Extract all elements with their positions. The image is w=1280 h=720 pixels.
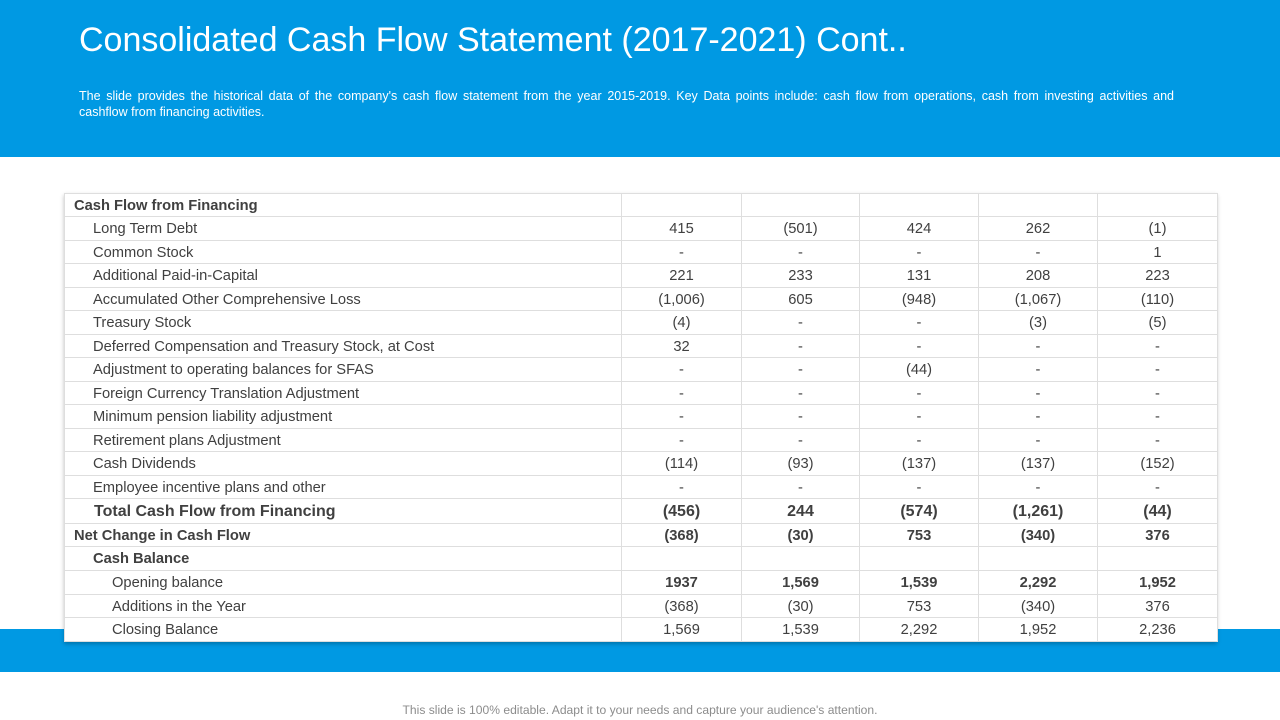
row: closing balance: 2,236 (1139, 622, 1176, 638)
row: accumulated other comprehensive loss: 605 (788, 292, 813, 308)
row: additional paid-in-capital: 221 (669, 268, 694, 284)
row: treasury stock: Treasury Stock (93, 315, 191, 331)
row: additional paid-in-capital: Additional Paid-in-Capital (93, 268, 258, 284)
row: long term debt: 415 (669, 221, 694, 237)
row: common stock: - (917, 244, 921, 260)
row: deferred compensation: - (1036, 338, 1040, 354)
row: additional paid-in-capital (93, 268, 1170, 284)
row: minimum pension liability: Minimum pension liability adjustment (93, 409, 332, 425)
row: net change in cash flow (74, 528, 1170, 544)
row: treasury stock (93, 315, 1166, 331)
row: accumulated other comprehensive loss: Accumulated Other Comprehensive Loss (93, 292, 361, 308)
description text: The slide provides the historical data of the company's cash flow statement from the year 2015-2019. Key Data points include: cash flow from operations, cash from investing activities and (79, 89, 1174, 103)
row: treasury stock: - (917, 315, 921, 331)
row: total cash flow from financing: (574) (900, 502, 938, 520)
row: closing balance: Closing Balance (112, 622, 218, 638)
row: adjustment to operating balances: - (798, 362, 803, 378)
row: cash balance heading: Cash Balance (93, 551, 189, 567)
lower blue band (0, 629, 1280, 672)
row: opening balance: 2,292 (1020, 575, 1056, 591)
row: total cash flow from financing: (44) (1143, 502, 1172, 520)
row: employee incentive plans: - (917, 480, 921, 496)
row: additional paid-in-capital: 131 (907, 268, 931, 284)
description text (79, 89, 1174, 119)
row: common stock: - (679, 244, 684, 260)
row: cash dividends: (137) (1021, 456, 1055, 472)
row: total cash flow from financing: (1,261) (1013, 502, 1063, 520)
row: retirement plans adjustment: - (1155, 432, 1160, 448)
row: minimum pension liability: - (917, 409, 921, 425)
row: total cash flow from financing: (456) (663, 502, 700, 520)
header band (0, 0, 1280, 157)
row: opening balance: 1937 (665, 575, 698, 591)
row: retirement plans adjustment: - (798, 432, 803, 448)
row: cash dividends (93, 456, 1175, 472)
row: long term debt: (501) (783, 221, 818, 237)
row: opening balance: 1,539 (901, 575, 937, 591)
row: retirement plans adjustment (93, 432, 1160, 448)
row: minimum pension liability: - (679, 409, 684, 425)
row: minimum pension liability: - (798, 409, 803, 425)
row: employee incentive plans: - (1155, 480, 1160, 496)
row: deferred compensation: - (917, 338, 921, 354)
row: foreign currency translation: - (798, 386, 803, 402)
row: cash dividends: Cash Dividends (93, 456, 196, 472)
row: deferred compensation (93, 338, 1160, 354)
row: foreign currency translation: Foreign Currency Translation Adjustment (93, 386, 359, 402)
row: foreign currency translation: - (917, 386, 921, 402)
row: deferred compensation: Deferred Compensation and Treasury Stock, at Cost (93, 338, 434, 354)
row: common stock: Common Stock (93, 244, 193, 260)
row: total cash flow from financing (94, 502, 1172, 520)
row: employee incentive plans: - (679, 480, 684, 496)
row: minimum pension liability: - (1155, 409, 1160, 425)
row: opening balance (112, 575, 1176, 591)
panel: cash flow table (64, 193, 1217, 642)
row: additions in the year (112, 598, 1170, 614)
row: retirement plans adjustment: - (1036, 432, 1040, 448)
row: employee incentive plans: Employee incentive plans and other (93, 480, 326, 496)
row: accumulated other comprehensive loss: (1,067) (1015, 292, 1061, 308)
row: closing balance: 1,952 (1020, 622, 1056, 638)
row: cash dividends: (137) (902, 456, 936, 472)
row: cash dividends: (152) (1140, 456, 1175, 472)
row: long term debt: 424 (907, 221, 931, 237)
row: deferred compensation: - (1155, 338, 1160, 354)
row: net change in cash flow: (340) (1021, 528, 1055, 544)
row: employee incentive plans: - (798, 480, 803, 496)
row: long term debt: Long Term Debt (93, 221, 197, 237)
description text: cashflow from financing activities. (79, 105, 264, 119)
row: foreign currency translation: - (679, 386, 684, 402)
row: long term debt: 262 (1026, 221, 1050, 237)
row: employee incentive plans (93, 480, 1160, 496)
row: foreign currency translation: - (1155, 386, 1160, 402)
row: adjustment to operating balances: - (679, 362, 684, 378)
row: opening balance: 1,569 (782, 575, 819, 591)
row: additional paid-in-capital: 208 (1026, 268, 1050, 284)
row: employee incentive plans: - (1036, 480, 1040, 496)
row: additions in the year: (30) (787, 598, 814, 614)
row: additions in the year: 753 (907, 598, 931, 614)
footer note: This slide is 100% editable. Adapt it to your needs and capture your audience's attention. (403, 703, 877, 717)
row: net change in cash flow: (30) (787, 528, 814, 544)
row: treasury stock: (4) (673, 315, 690, 331)
title: Consolidated Cash Flow Statement (2017-2021) Cont.. (79, 21, 907, 59)
row: retirement plans adjustment: - (679, 432, 684, 448)
row: cash dividends: (93) (787, 456, 814, 472)
row: deferred compensation: 32 (673, 338, 690, 354)
row: deferred compensation: - (798, 338, 803, 354)
row: additions in the year: (368) (664, 598, 699, 614)
row: common stock: - (798, 244, 803, 260)
row: opening balance: Opening balance (112, 575, 223, 591)
row: total cash flow from financing: 244 (787, 502, 814, 520)
row: treasury stock: (5) (1149, 315, 1166, 331)
row: net change in cash flow: 376 (1145, 528, 1170, 544)
row: treasury stock: (3) (1029, 315, 1047, 331)
row: additions in the year: Additions in the Year (112, 598, 246, 614)
row: net change in cash flow: 753 (907, 528, 931, 544)
row: closing balance (112, 622, 1176, 638)
row: retirement plans adjustment: Retirement plans Adjustment (93, 432, 281, 448)
row: opening balance: 1,952 (1139, 575, 1176, 591)
row: net change in cash flow: (368) (664, 528, 699, 544)
row: total cash flow from financing: Total Cash Flow from Financing (94, 502, 335, 520)
row: net change in cash flow: Net Change in Cash Flow (74, 528, 250, 544)
row: adjustment to operating balances: - (1155, 362, 1160, 378)
row: cash flow from financing heading: Cash Flow from Financing (74, 198, 258, 214)
row: minimum pension liability (93, 409, 1160, 425)
row: adjustment to operating balances: (44) (906, 362, 932, 378)
row: long term debt: (1) (1149, 221, 1166, 237)
row: cash dividends: (114) (665, 456, 698, 472)
row: closing balance: 2,292 (901, 622, 937, 638)
row: closing balance: 1,539 (782, 622, 819, 638)
row: treasury stock: - (798, 315, 803, 331)
row: adjustment to operating balances: - (1036, 362, 1040, 378)
row: foreign currency translation: - (1036, 386, 1040, 402)
row: additions in the year: 376 (1145, 598, 1170, 614)
row: closing balance: 1,569 (663, 622, 700, 638)
row: retirement plans adjustment: - (917, 432, 921, 448)
row: minimum pension liability: - (1036, 409, 1040, 425)
row: accumulated other comprehensive loss: (948) (902, 292, 936, 308)
row: common stock: - (1036, 244, 1040, 260)
row: additions in the year: (340) (1021, 598, 1055, 614)
row: adjustment to operating balances (93, 362, 1160, 378)
row: foreign currency translation (93, 386, 1160, 402)
row: accumulated other comprehensive loss: (110) (1141, 292, 1174, 308)
row: common stock: 1 (1153, 244, 1162, 260)
row: additional paid-in-capital: 233 (788, 268, 813, 284)
row: common stock (93, 244, 1162, 260)
row: accumulated other comprehensive loss (93, 292, 1174, 308)
row: long term debt (93, 221, 1166, 237)
row: adjustment to operating balances: Adjustment to operating balances for SFAS (93, 362, 374, 378)
row: additional paid-in-capital: 223 (1145, 268, 1170, 284)
row: accumulated other comprehensive loss: (1,006) (658, 292, 705, 308)
